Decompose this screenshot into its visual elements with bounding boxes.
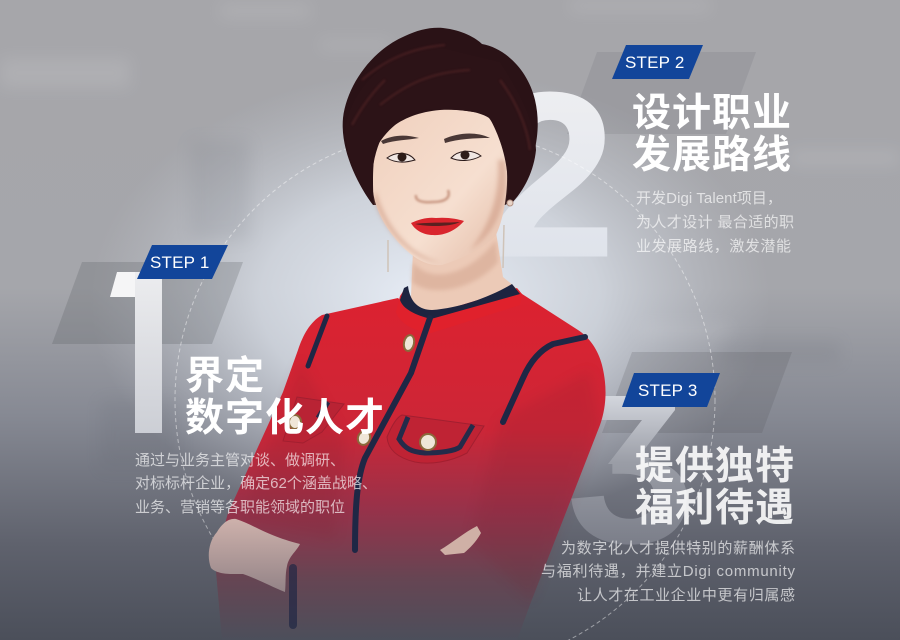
big numeral 1: 1 — [73, 224, 202, 483]
big numeral 1 — [110, 272, 162, 433]
hands — [209, 519, 481, 592]
panel: step 2 backdrop parallelogram — [567, 52, 756, 134]
dashed orbit circle — [175, 130, 715, 640]
step 2 badge — [612, 45, 703, 79]
step 3 heading: 福利待遇 — [635, 487, 795, 530]
step 2 description: 业发展路线，激发潜能 — [636, 238, 791, 255]
step 2 badge: STEP 2 — [625, 53, 684, 72]
step 1 description: 业务、营销等各职能领域的职位 — [135, 498, 345, 516]
step 1 description: 通过与业务主管对谈、做调研、 — [135, 452, 345, 469]
back hair — [343, 28, 538, 205]
step 3 heading — [635, 445, 795, 530]
fringe — [345, 45, 536, 205]
collar — [396, 288, 522, 333]
eyebrows — [381, 134, 490, 144]
jacket body — [215, 292, 606, 640]
step 2 heading: 设计职业 — [632, 92, 792, 135]
neck — [400, 232, 520, 320]
cheek shading — [374, 160, 506, 262]
step 1 description: 对标标杆企业，确定62个涵盖战略、 — [135, 474, 377, 492]
buttons — [289, 334, 436, 450]
step 2 description: 为人才设计 最合适的职 — [636, 214, 794, 231]
step 3 description — [541, 540, 796, 604]
step 2 description: 开发Digi Talent项目， — [636, 190, 782, 207]
step 1 badge — [137, 245, 228, 279]
big numeral 2: 2 — [486, 46, 615, 305]
step 1 heading — [185, 355, 385, 440]
jacket trim lines — [293, 316, 585, 625]
lips — [411, 218, 464, 235]
step 3 badge: STEP 3 — [638, 381, 697, 400]
portrait of woman in red jacket — [209, 28, 606, 640]
panel: step 1 backdrop parallelogram — [52, 262, 243, 344]
step 3 description: 让人才在工业企业中更有归属感 — [577, 586, 795, 604]
eyes — [387, 150, 481, 162]
step 3 heading: 提供独特 — [635, 445, 795, 488]
step 3 badge — [622, 373, 720, 407]
step 1 description — [135, 452, 377, 516]
step 2 heading — [632, 92, 792, 177]
big numeral 3 — [572, 396, 686, 544]
big numeral 3: 3 — [566, 333, 695, 592]
nose — [416, 190, 449, 202]
step 3 description: 为数字化人才提供特别的薪酬体系 — [561, 540, 795, 557]
step 2 heading: 发展路线 — [632, 134, 792, 177]
step 1 badge: STEP 1 — [150, 253, 209, 272]
jacket shading — [240, 360, 600, 602]
step 1 heading: 界定 — [185, 355, 265, 398]
pockets — [283, 397, 484, 463]
step 1 heading: 数字化人才 — [185, 397, 385, 440]
step 3 description: 与福利待遇，并建立Digi community — [541, 563, 796, 580]
panel: step 3 backdrop parallelogram — [602, 352, 792, 433]
earrings — [388, 200, 513, 272]
step 2 description — [636, 190, 794, 255]
face — [372, 110, 507, 265]
